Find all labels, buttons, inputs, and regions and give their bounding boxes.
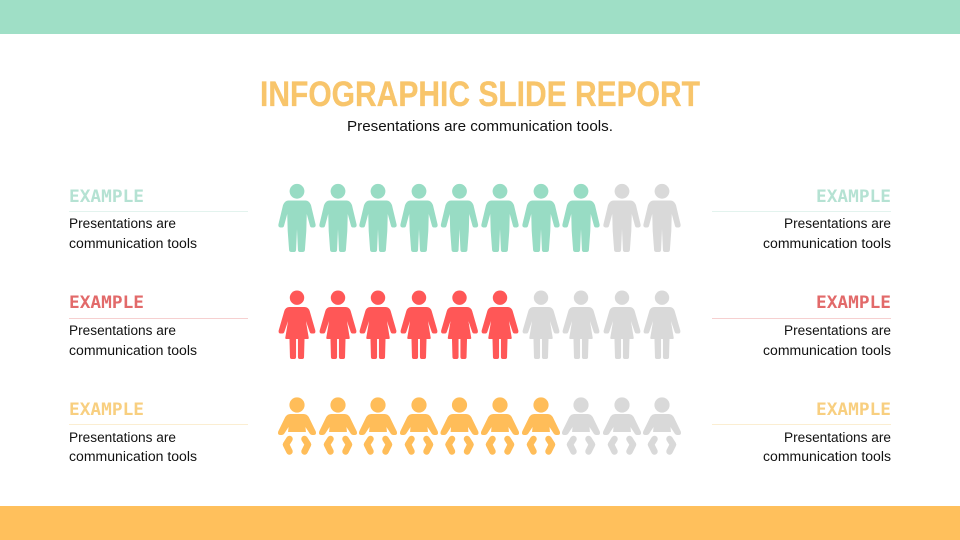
pictogram row: women, 6 of 10 <box>279 290 680 359</box>
left block: yellow example: communication tools <box>69 449 197 464</box>
subtitle: Presentations are communication tools. <box>347 119 613 135</box>
right block: red example: communication tools <box>763 343 891 358</box>
right block: teal example <box>712 187 891 251</box>
left block: teal example: Presentations are <box>69 216 176 231</box>
left block: yellow example: Presentations are <box>69 430 176 445</box>
left block: red example: EXAMPLE <box>69 293 144 312</box>
top band <box>0 0 960 34</box>
left block: yellow example <box>69 400 248 464</box>
right block: red example: EXAMPLE <box>816 293 891 312</box>
right block: teal example: communication tools <box>763 236 891 251</box>
title: INFOGRAPHIC SLIDE REPORT <box>260 75 700 114</box>
bottom band <box>0 506 960 540</box>
right block: teal example: Presentations are <box>784 216 891 231</box>
right block: red example: Presentations are <box>784 323 891 338</box>
right block: yellow example <box>712 400 891 464</box>
left block: yellow example: EXAMPLE <box>69 400 144 419</box>
left block: red example <box>69 293 248 358</box>
left block: red example: communication tools <box>69 343 197 358</box>
left block: red example: Presentations are <box>69 323 176 338</box>
right block: yellow example: EXAMPLE <box>816 400 891 419</box>
right block: red example <box>712 293 891 358</box>
right block: yellow example: communication tools <box>763 449 891 464</box>
left block: teal example <box>69 187 248 251</box>
right block: yellow example: Presentations are <box>784 430 891 445</box>
left block: teal example: EXAMPLE <box>69 187 144 206</box>
left block: teal example: communication tools <box>69 236 197 251</box>
pictogram row: babies, 7 of 10 <box>278 397 681 452</box>
pictogram row: men, 8 of 10 <box>278 184 681 252</box>
right block: teal example: EXAMPLE <box>816 187 891 206</box>
